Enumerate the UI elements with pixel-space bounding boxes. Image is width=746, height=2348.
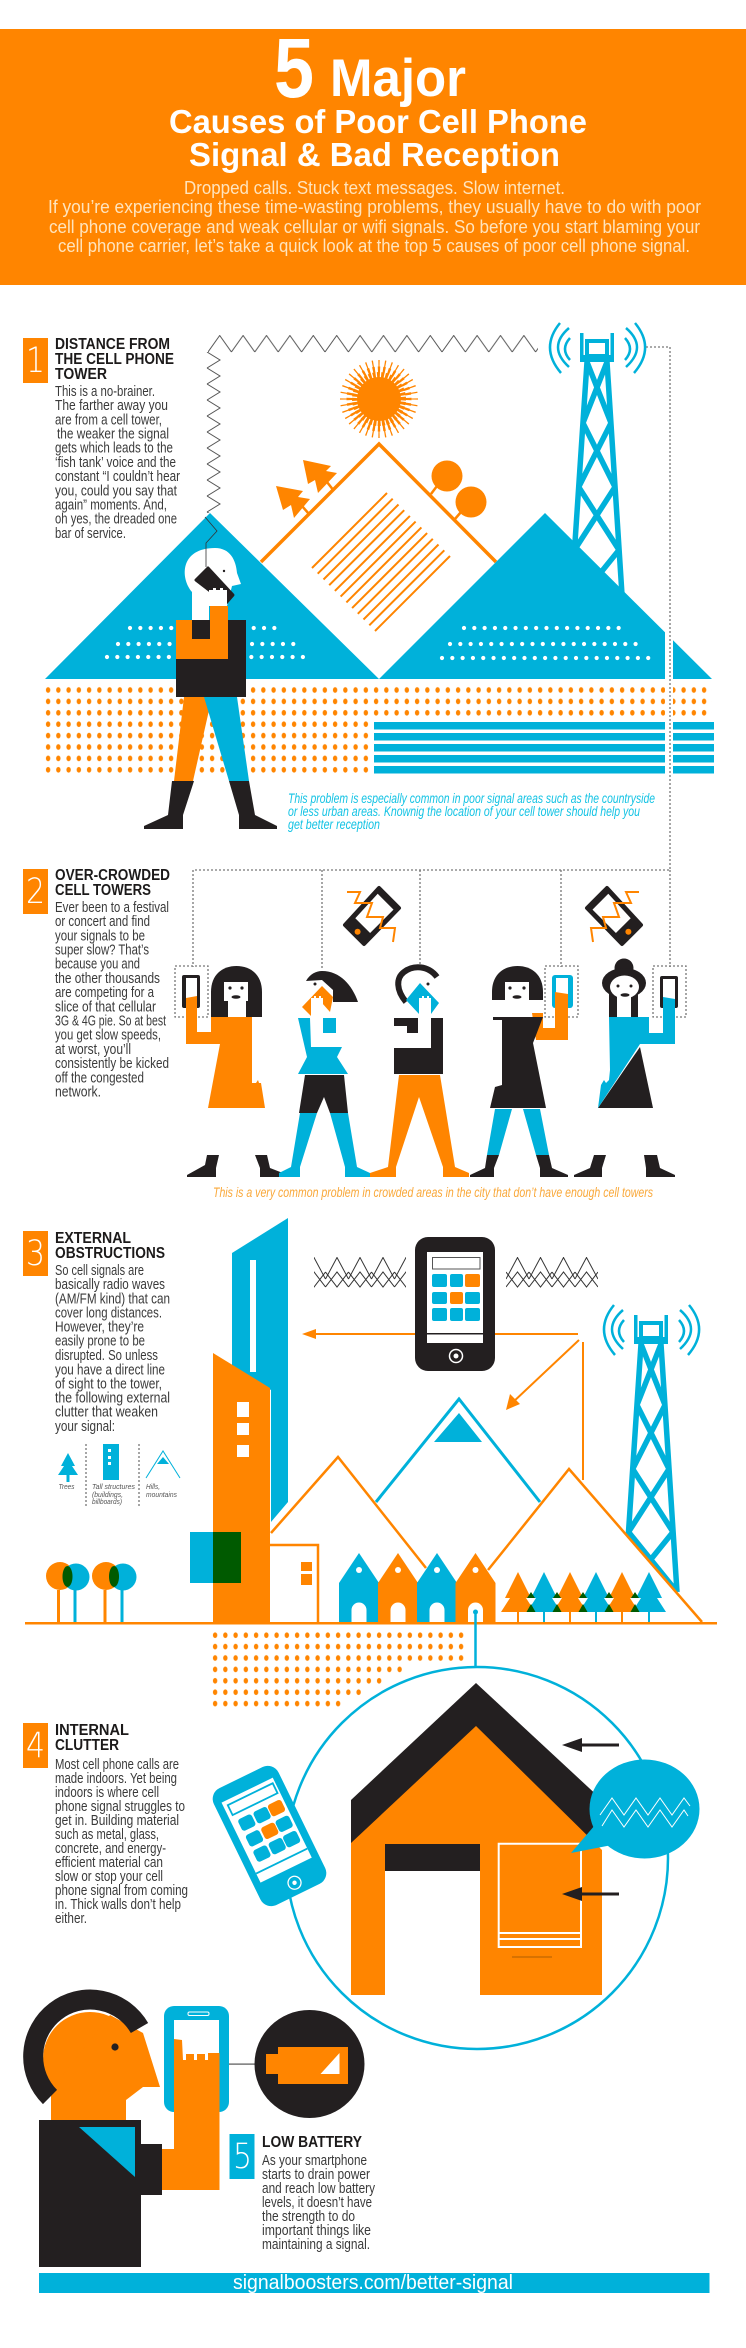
person with phone (144, 517, 277, 829)
circle outline (286, 1667, 668, 2049)
body text 1: again” moments. And, (55, 498, 167, 514)
blue mountains (45, 513, 712, 679)
arrow-shaped trees (276, 460, 337, 518)
body text 5: and reach low battery (262, 2181, 376, 2197)
intro text: cell phone carrier, let’s take a quick look at the top 5 causes of poor cell phone signal. (58, 235, 690, 256)
white dots on mountains (107, 628, 658, 658)
head (33, 2000, 160, 2120)
body text 2: slice of that cellular (55, 999, 156, 1015)
body text 2: 3G & 4G pie. So at best (55, 1014, 166, 1030)
round trees row (46, 1562, 136, 1622)
legend labels: mountains (146, 1490, 177, 1499)
legend labels: Trees (58, 1482, 75, 1491)
footer bar (39, 2272, 710, 2294)
body text 3: easily prone to be (55, 1334, 145, 1350)
body text 3: basically radio waves (55, 1277, 165, 1293)
body text 4: either. (55, 1911, 87, 1927)
panel: cause 4 text (23, 1722, 188, 1927)
body text 4: get in. Building material (55, 1813, 179, 1829)
body text 4: in. Thick walls don’t help (55, 1897, 181, 1913)
cell tower 2 (604, 1305, 699, 1592)
torso (39, 2120, 162, 2267)
heading 1: DISTANCE FROM (55, 336, 170, 353)
title (169, 21, 587, 173)
legend labels: (buildings, (92, 1490, 123, 1499)
heading 3: OBSTRUCTIONS (55, 1245, 165, 1262)
icon: hills (146, 1451, 180, 1478)
number badge 1: 1 (26, 341, 45, 381)
speech bubble with signal (571, 1760, 700, 1858)
icon: tall structure (103, 1444, 119, 1480)
body text 1 (55, 384, 180, 542)
intro text: If you’re experiencing these time-wasting problems, they usually have to do with poor (48, 196, 701, 217)
body text 4: such as metal, glass, (55, 1827, 159, 1843)
body text 3: (AM/FM kind) that can (55, 1291, 170, 1307)
signal arrows (302, 1329, 583, 1480)
body text 5: starts to drain power (262, 2167, 370, 2183)
title: Signal & Bad Reception (189, 136, 560, 173)
row of houses (339, 1553, 496, 1622)
arm (162, 2039, 220, 2190)
panel: cause 1 text (23, 336, 180, 542)
caption 1 (288, 791, 655, 832)
body text 4: efficient material can (55, 1855, 163, 1871)
connector to house circle (473, 1610, 478, 1667)
orange mountains (271, 1457, 702, 1622)
number badge 5: 5 (233, 2137, 252, 2177)
body text 4: indoors is where cell (55, 1785, 159, 1801)
ground line (25, 1622, 717, 1624)
body text 2: are competing for a (55, 985, 155, 1001)
body text 2: the other thousands (55, 971, 160, 987)
small outlined building (270, 1545, 318, 1622)
heading 5: LOW BATTERY (262, 2134, 363, 2151)
signal zigzag top (208, 335, 538, 353)
body text 3 (55, 1263, 170, 1435)
crossed signal waves right (506, 1257, 598, 1288)
body text 5: levels, it doesn’t have (262, 2195, 372, 2211)
blue stripes (374, 722, 714, 774)
body text 2: off the congested (55, 1070, 144, 1086)
legend labels: billboards) (92, 1497, 122, 1506)
person 4: black dress (470, 966, 573, 1177)
footer bar: signalboosters.com/better-signal (233, 2272, 513, 2294)
number badge 4: 4 (26, 1726, 45, 1766)
body text 2: consistently be kicked (55, 1056, 169, 1072)
heading 3 (55, 1230, 165, 1262)
cell tower 1 (550, 323, 645, 610)
orange dot field (43, 684, 712, 775)
mountain stripes (312, 493, 450, 631)
blue mountain (376, 1399, 540, 1502)
body text 1: This is a no-brainer. (55, 384, 155, 400)
body text 2: network. (55, 1084, 101, 1100)
signal zigzag left (206, 352, 221, 513)
body text 5: As your smartphone (262, 2153, 367, 2169)
illustration: house in circle (209, 1667, 700, 2049)
body text 1: gets which leads to the (55, 441, 173, 457)
house (351, 1683, 602, 1995)
legend labels: Tall structures (92, 1482, 135, 1491)
body text 2: or concert and find (55, 914, 150, 930)
dotted connector right (193, 347, 670, 970)
body text 4: concrete, and energy- (55, 1841, 166, 1857)
link line (229, 2064, 255, 2065)
heading 1: TOWER (55, 366, 107, 383)
body text 1: are from a cell tower, (55, 412, 162, 428)
body text 1: ‘fish tank’ voice and the (55, 455, 176, 471)
body text 1: bar of service. (55, 526, 126, 542)
body text 3: cover long distances. (55, 1305, 162, 1321)
body text 2: you get slow speeds, (55, 1028, 161, 1044)
heading 2: OVER-CROWDED (55, 867, 170, 884)
body text 4: phone signal struggles to (55, 1799, 185, 1815)
body text 5 (262, 2153, 376, 2253)
body text 4: phone signal from coming (55, 1883, 188, 1899)
title: 5 (274, 21, 314, 115)
body text 4: Most cell phone calls are (55, 1757, 179, 1773)
person 2: blue top (279, 971, 370, 1177)
icon: tilted blue phone (209, 1762, 330, 1910)
intro text: Dropped calls. Stuck text messages. Slow internet. (184, 177, 565, 198)
blue tower block (232, 1218, 288, 1522)
orange building (190, 1353, 270, 1622)
phone in hand (164, 2006, 229, 2112)
body text 4: slow or stop your cell (55, 1869, 163, 1885)
legend labels (58, 1482, 177, 1506)
body text 3: clutter that weaken (55, 1405, 158, 1421)
person 5: bun and blue dress (574, 958, 678, 1177)
heading 3: EXTERNAL (55, 1230, 131, 1247)
body text 2: because you and (55, 957, 140, 973)
caption 1: or less urban areas. Knownig the location of your cell tower should help you (288, 804, 640, 819)
body text 1: the weaker the signal (57, 427, 169, 443)
body text 5: important things like (262, 2223, 371, 2239)
body text 4: made indoors. Yet being (55, 1771, 177, 1787)
illustration: crowd with phones (175, 888, 686, 1200)
icon: sun (344, 364, 414, 434)
panel: cause 2 text (23, 867, 170, 1100)
orange dot triangle (210, 1630, 466, 1710)
body text 2: Ever been to a festival (55, 900, 169, 916)
number badge 2: 2 (26, 872, 45, 912)
illustration: town with obstructions (25, 1218, 717, 1710)
dotted phone boxes (175, 966, 686, 1017)
heading 4: CLUTTER (55, 1737, 119, 1754)
round trees (431, 460, 486, 519)
body text 1: oh yes, the dreaded one (55, 512, 177, 528)
body text 3: of sight to the tower, (55, 1376, 162, 1392)
body text 2: super slow? That’s (55, 943, 149, 959)
body text 5: maintaining a signal. (262, 2237, 370, 2253)
crossed signal waves left (314, 1257, 406, 1288)
body text 5: the strength to do (262, 2209, 355, 2225)
icon: broken phone right (587, 888, 641, 944)
heading 2: CELL TOWERS (55, 882, 151, 899)
heading 1: THE CELL PHONE (55, 351, 174, 368)
orange mountain outline (261, 444, 496, 562)
legend: clutter types (58, 1444, 180, 1506)
icon: low battery (254, 2010, 364, 2118)
illustration: man with low battery phone (33, 2000, 364, 2267)
panel: header (0, 21, 746, 285)
legend labels: Hills, (146, 1482, 160, 1491)
body text 2: your signals to be (55, 928, 145, 944)
heading 1 (55, 336, 174, 383)
title: Causes of Poor Cell Phone (169, 103, 587, 140)
panel: cause 3 text (23, 1230, 180, 1506)
person 1: orange dress (182, 966, 288, 1177)
heading 4 (55, 1722, 129, 1754)
panel: cause 5 text (230, 2134, 376, 2253)
icon: tree (58, 1453, 78, 1482)
illustration: countryside scene (43, 323, 714, 970)
body text 3: the following external (55, 1391, 170, 1407)
icon: broken phone left (345, 888, 399, 944)
intro text: cell phone coverage and weak cellular or wifi signals. So before you start blaming your (49, 216, 700, 237)
body text 3: However, they’re (55, 1320, 144, 1336)
person 3: black top, orange trousers (370, 967, 469, 1177)
intro text (48, 177, 701, 256)
body text 3: you have a direct line (55, 1362, 165, 1378)
body text 3: disrupted. So unless (55, 1348, 158, 1364)
heading 2 (55, 867, 170, 899)
caption 1: get better reception (288, 817, 380, 832)
body text 1: you, could you say that (55, 483, 177, 499)
body text 2 (55, 900, 169, 1100)
heading 4: INTERNAL (55, 1722, 129, 1739)
white strip for dotted line (665, 630, 673, 780)
body text 2: at worst, you’ll (55, 1042, 131, 1058)
body text 1: The farther away you (55, 398, 168, 414)
row of pine trees (501, 1572, 666, 1622)
title: Major (330, 49, 466, 108)
arrows into house (562, 1738, 619, 1901)
body text 4 (55, 1757, 188, 1927)
number badge 3: 3 (26, 1234, 45, 1274)
body text 3: So cell signals are (55, 1263, 144, 1279)
body text 3: your signal: (55, 1419, 115, 1435)
icon: phone with keypad (415, 1237, 495, 1371)
body text 1: constant “I couldn’t hear (55, 469, 180, 485)
